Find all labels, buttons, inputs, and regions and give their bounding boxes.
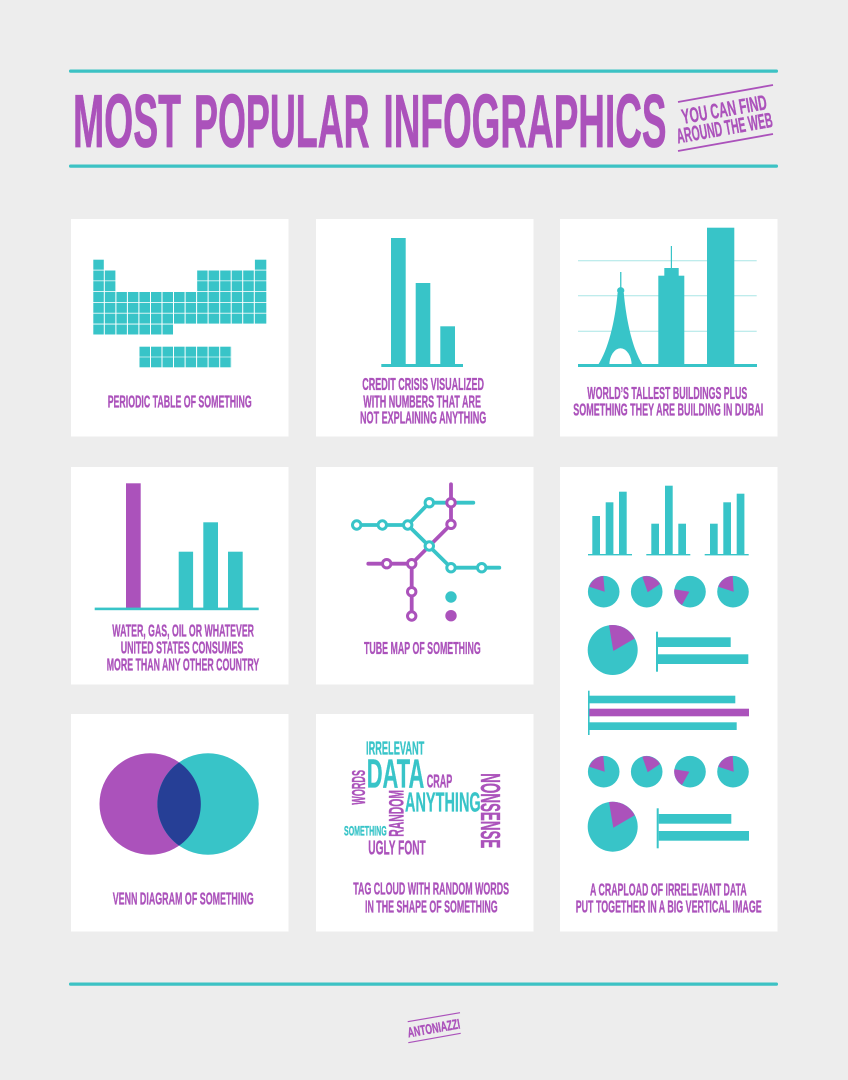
caption: [573, 383, 763, 420]
logo: ANTONIAZZI: [406, 1015, 461, 1040]
panel: crapload of data: [560, 467, 778, 932]
title: POPULAR: [194, 79, 370, 163]
tag cloud: RANDOM: [385, 790, 408, 837]
icon: dubai tower: [707, 228, 734, 366]
subtitle tag: [675, 85, 774, 151]
panel: tag cloud: [316, 714, 534, 932]
header: [69, 70, 778, 168]
large pie: [588, 625, 638, 675]
tag cloud: DATA: [367, 750, 424, 796]
tag cloud: SOMETHING: [344, 824, 387, 839]
caption: IN THE SHAPE OF SOMETHING: [365, 896, 498, 916]
caption: WITH NUMBERS THAT ARE: [363, 391, 481, 411]
bar chart: [381, 238, 463, 367]
caption: [576, 880, 762, 916]
panel: tallest buildings: [560, 219, 778, 436]
tube map: [352, 484, 499, 621]
bar chart: [95, 483, 259, 610]
subtitle tag: YOU CAN FIND: [680, 91, 769, 129]
tag cloud: IRRELEVANT: [366, 739, 424, 759]
panel: us consumption: [71, 467, 288, 684]
caption: VENN DIAGRAM OF SOMETHING: [113, 888, 254, 908]
caption: UNITED STATES CONSUMES: [121, 637, 243, 657]
panel: periodic table: [71, 219, 288, 436]
horizontal bars: [656, 632, 748, 672]
caption: [107, 621, 259, 675]
caption: NOT EXPLAINING ANYTHING: [360, 408, 486, 428]
caption: MORE THAN ANY OTHER COUNTRY: [107, 655, 259, 675]
panel: credit crisis: [316, 219, 534, 436]
logo: [406, 1013, 461, 1043]
panel: venn diagram: [71, 714, 288, 932]
long horizontal bars: [588, 691, 749, 735]
tag cloud: [344, 739, 506, 860]
title: [73, 79, 666, 163]
building chart: [578, 228, 757, 367]
panel: tube map: [316, 467, 534, 684]
tag cloud: CRAP: [427, 771, 452, 791]
icon: eiffel tower: [598, 272, 643, 366]
caption: [353, 879, 509, 916]
caption: CREDIT CRISIS VISUALIZED: [362, 374, 484, 394]
caption: TUBE MAP OF SOMETHING: [364, 638, 481, 658]
footer rule: [69, 982, 778, 986]
large pie: [588, 802, 638, 852]
caption: PERIODIC TABLE OF SOMETHING: [108, 392, 252, 412]
venn diagram: [100, 753, 259, 855]
pie row: [588, 756, 749, 788]
icon: skyscraper: [658, 246, 684, 366]
title: MOST: [73, 79, 181, 163]
tag cloud: ANYTHING: [405, 786, 481, 817]
caption: TAG CLOUD WITH RANDOM WORDS: [353, 879, 509, 899]
tag cloud: NONSENSE: [475, 773, 506, 848]
periodic table grid: [93, 258, 266, 368]
horizontal bars: [657, 808, 749, 848]
tag cloud: WORDS: [349, 770, 369, 805]
caption: WATER, GAS, OIL OR WHATEVER: [112, 621, 254, 641]
tag cloud: UGLY FONT: [368, 838, 426, 860]
caption: [360, 374, 486, 428]
bar chart group: [588, 486, 749, 555]
pie row: [588, 576, 749, 608]
